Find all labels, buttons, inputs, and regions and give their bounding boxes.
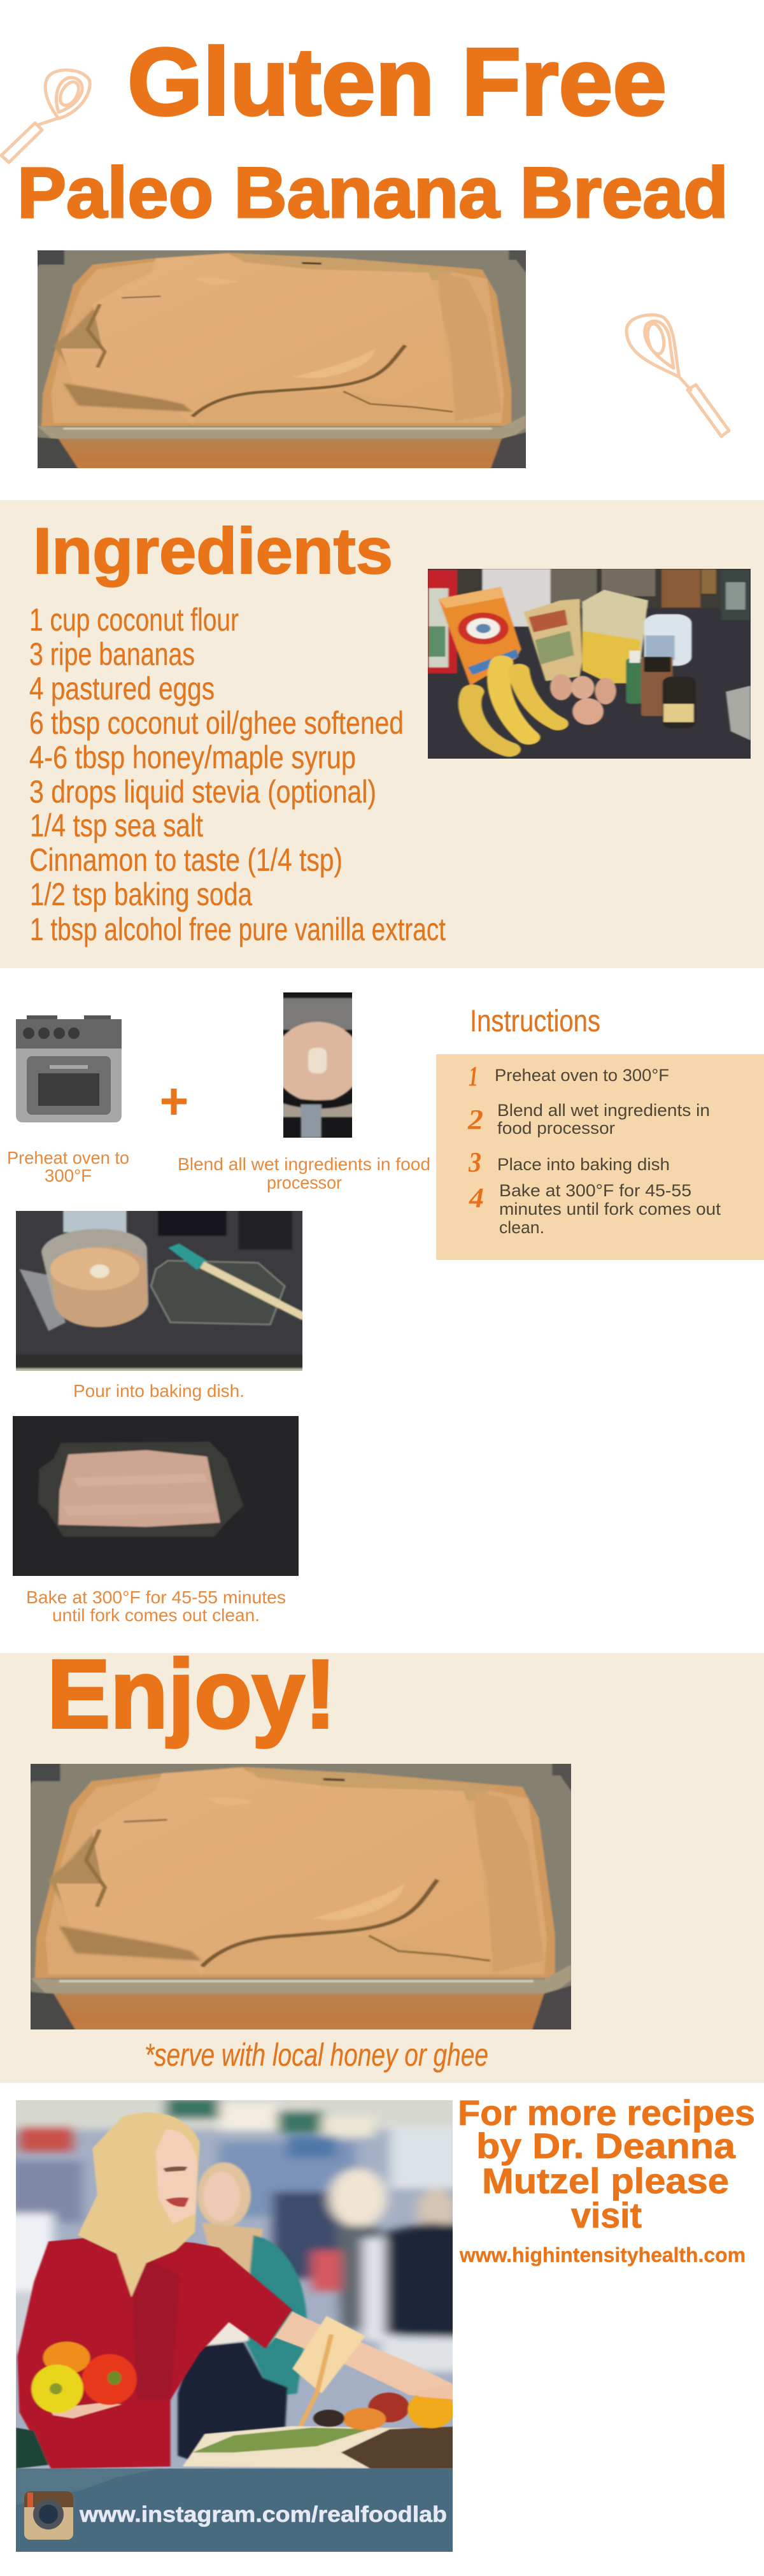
call to action: more recipes bbox=[458, 2093, 755, 2235]
subtitle: Paleo Banana Bread: Paleo Banana Bread bbox=[17, 153, 728, 233]
instagram icon bbox=[24, 2491, 73, 2540]
heading: Ingredients: Ingredients bbox=[33, 515, 393, 587]
ingredient list: 1/4 tsp sea salt bbox=[30, 808, 203, 843]
ingredient list: 4-6 tbsp honey/maple syrup bbox=[29, 740, 356, 775]
call to action: more recipes: visit bbox=[571, 2195, 642, 2235]
caption: blend wet ingredients bbox=[178, 1154, 430, 1192]
heading: Enjoy!: Enjoy! bbox=[47, 1640, 336, 1749]
step 1: 1 bbox=[469, 1061, 478, 1092]
step 4: minutes until fork comes out bbox=[499, 1199, 721, 1219]
panel: enjoy bbox=[0, 1640, 764, 2083]
photo: finished banana bread bbox=[31, 1764, 571, 2029]
caption: blend wet ingredients: Blend all wet ingredients in food bbox=[178, 1154, 430, 1174]
ingredient list: 6 tbsp coconut oil/ghee softened bbox=[29, 705, 404, 741]
photo: food processor from above bbox=[283, 992, 352, 1138]
photo: ingredients on counter bbox=[428, 569, 751, 759]
step 4 bbox=[469, 1181, 721, 1237]
step 4: Bake at 300°F for 45-55 bbox=[499, 1181, 691, 1200]
step 2: Blend all wet ingredients in bbox=[497, 1101, 710, 1120]
caption: blend wet ingredients: processor bbox=[267, 1173, 342, 1192]
photo: woman choosing peppers at a farmers market bbox=[0, 2089, 468, 2552]
step 2 bbox=[467, 1101, 710, 1138]
icon: oven bbox=[16, 1015, 122, 1122]
ingredient list bbox=[29, 602, 446, 947]
step 3: 3 bbox=[468, 1147, 481, 1178]
call to action: more recipes: For more recipes bbox=[458, 2093, 755, 2133]
photo: batter and baking dish on counter bbox=[16, 1211, 302, 1371]
call to action: more recipes: by Dr. Deanna bbox=[476, 2126, 736, 2166]
step 2: food processor bbox=[497, 1119, 615, 1138]
step 4: clean. bbox=[499, 1218, 544, 1237]
step 4: 4 bbox=[469, 1182, 484, 1213]
step 3: Place into baking dish bbox=[497, 1155, 670, 1174]
ingredient list: 1 tbsp alcohol free pure vanilla extract bbox=[30, 912, 446, 947]
icon: whisk right bbox=[626, 315, 729, 436]
icon: whisk left bbox=[1, 70, 90, 162]
step 1 bbox=[469, 1061, 669, 1092]
ingredient list: 3 drops liquid stevia (optional) bbox=[29, 774, 376, 810]
ingredient list: Cinnamon to taste (1/4 tsp) bbox=[29, 842, 343, 878]
heading: Instructions: Instructions bbox=[470, 1005, 600, 1038]
panel: ingredients bbox=[0, 500, 764, 968]
panel: numbered instructions bbox=[436, 1054, 764, 1260]
caption: preheat oven: Preheat oven to bbox=[7, 1148, 129, 1168]
call to action: more recipes: Mutzel please bbox=[482, 2161, 729, 2201]
caption: preheat oven: 300°F bbox=[45, 1166, 92, 1185]
caption: bake at 300F: until fork comes out clean. bbox=[52, 1605, 260, 1625]
step 1: Preheat oven to 300°F bbox=[495, 1066, 669, 1085]
step 2: 2 bbox=[467, 1104, 483, 1135]
caption: bake at 300F: Bake at 300°F for 45-55 minutes bbox=[26, 1587, 286, 1607]
step 3 bbox=[468, 1147, 670, 1178]
title: Gluten Free: Gluten Free bbox=[127, 28, 667, 135]
caption: preheat oven bbox=[7, 1148, 129, 1185]
ingredient list: 4 pastured eggs bbox=[29, 671, 215, 706]
note: serve with local honey or ghee: *serve with local honey or ghee bbox=[145, 2037, 488, 2073]
instagram url: www.instagram.com/realfoodlab bbox=[79, 2502, 447, 2527]
photo: batter in baking dish bbox=[13, 1416, 299, 1576]
icon: plus sign bbox=[162, 1089, 187, 1115]
ingredient list: 3 ripe bananas bbox=[29, 636, 195, 672]
website url: www.highintensityhealth.com bbox=[459, 2243, 746, 2266]
ingredient list: 1 cup coconut flour bbox=[29, 602, 239, 638]
hero photo: baked banana bread in glass dish bbox=[38, 250, 526, 468]
caption: pour into baking dish: Pour into baking dish. bbox=[73, 1381, 244, 1401]
caption: bake at 300F bbox=[26, 1587, 286, 1625]
ingredient list: 1/2 tsp baking soda bbox=[30, 877, 252, 912]
